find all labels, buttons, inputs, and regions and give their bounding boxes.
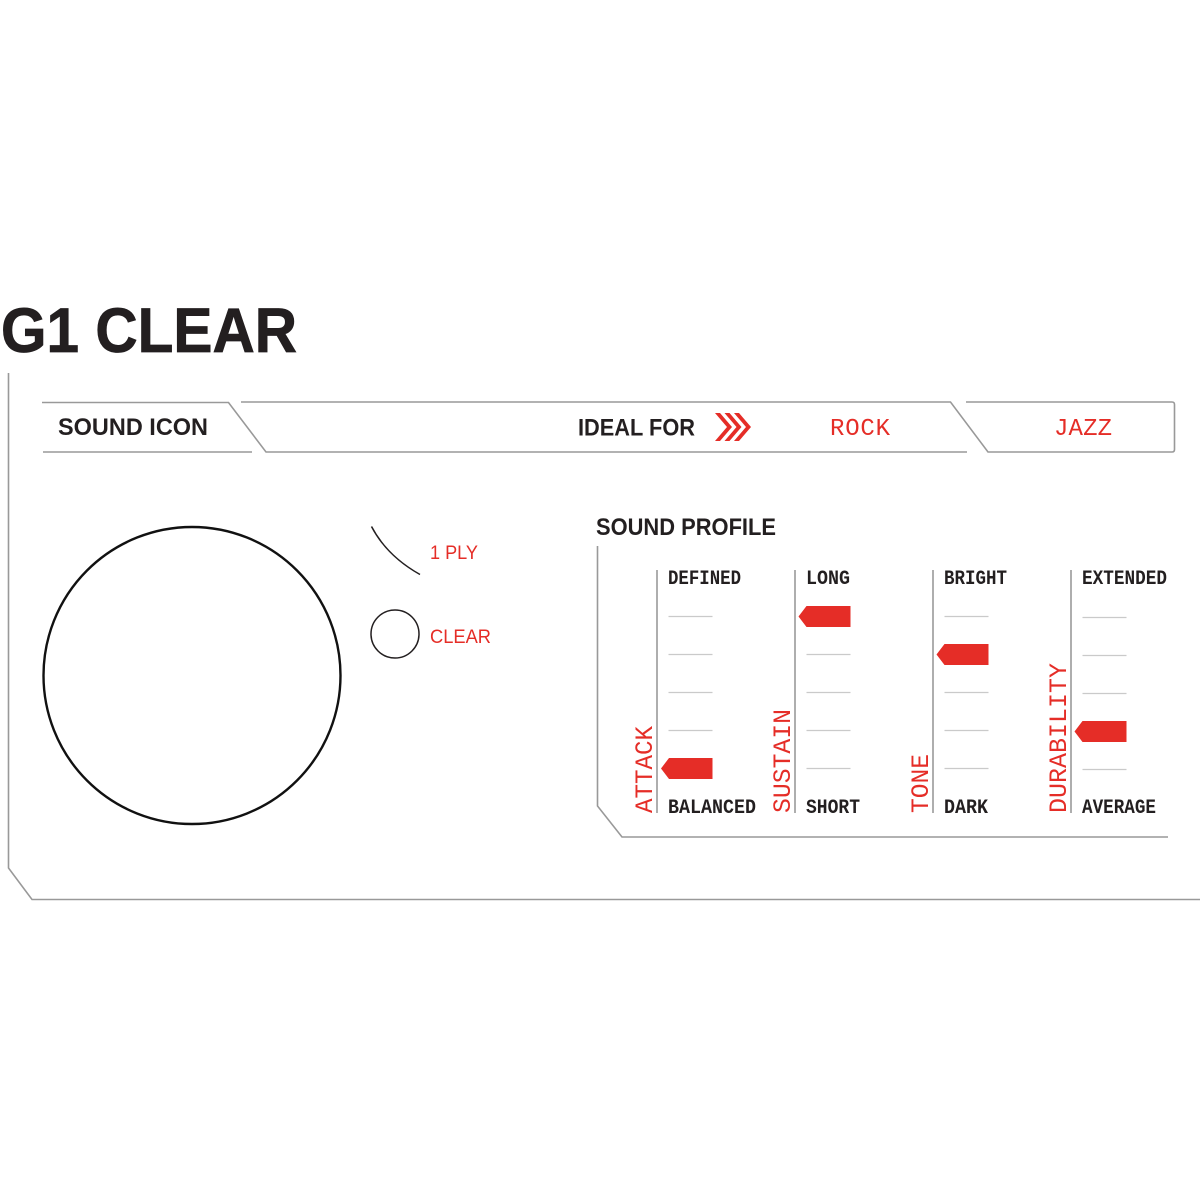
chart: sustain [769,568,860,820]
axis label: sustain: SUSTAIN [769,709,798,813]
label: average: AVERAGE [1082,797,1156,820]
heading: sound icon: SOUND ICON [58,414,208,441]
marker: tone level [936,644,988,665]
chart: tone [907,568,1007,820]
label: balanced: BALANCED [668,797,756,820]
chart: attack [631,568,756,820]
icon: large sound circle [44,527,340,824]
panel: sound profile frame [598,546,1168,837]
icon: clear circle [371,610,419,658]
axis label: attack: ATTACK [631,726,660,813]
panel: ideal for bar [241,402,1174,452]
icon: triple chevron [715,413,751,441]
title: G1 CLEAR [1,296,297,366]
label: dark: DARK [944,797,988,820]
marker: sustain level [798,606,850,627]
chart: durability [1045,568,1167,820]
label: clear: CLEAR [430,626,491,648]
icon: ply curve [372,526,420,574]
label: short: SHORT [806,797,860,820]
label: long: LONG [806,568,850,591]
label: extended: EXTENDED [1082,568,1167,591]
axis label: durability: DURABILITY [1045,663,1074,813]
label: bright: BRIGHT [944,568,1007,591]
heading: sound profile: SOUND PROFILE [596,514,776,541]
label: rock: ROCK [830,416,891,443]
axis label: tone: TONE [907,754,936,813]
marker: attack level [661,758,712,779]
label: 1 ply: 1 PLY [430,542,478,564]
label: defined: DEFINED [668,568,741,591]
marker: durability level [1074,721,1126,742]
panel: outer frame [8,373,1200,900]
label: jazz: JAZZ [1054,416,1112,443]
heading: ideal for: IDEAL FOR [578,414,695,442]
panel: sound icon tab [42,402,967,452]
